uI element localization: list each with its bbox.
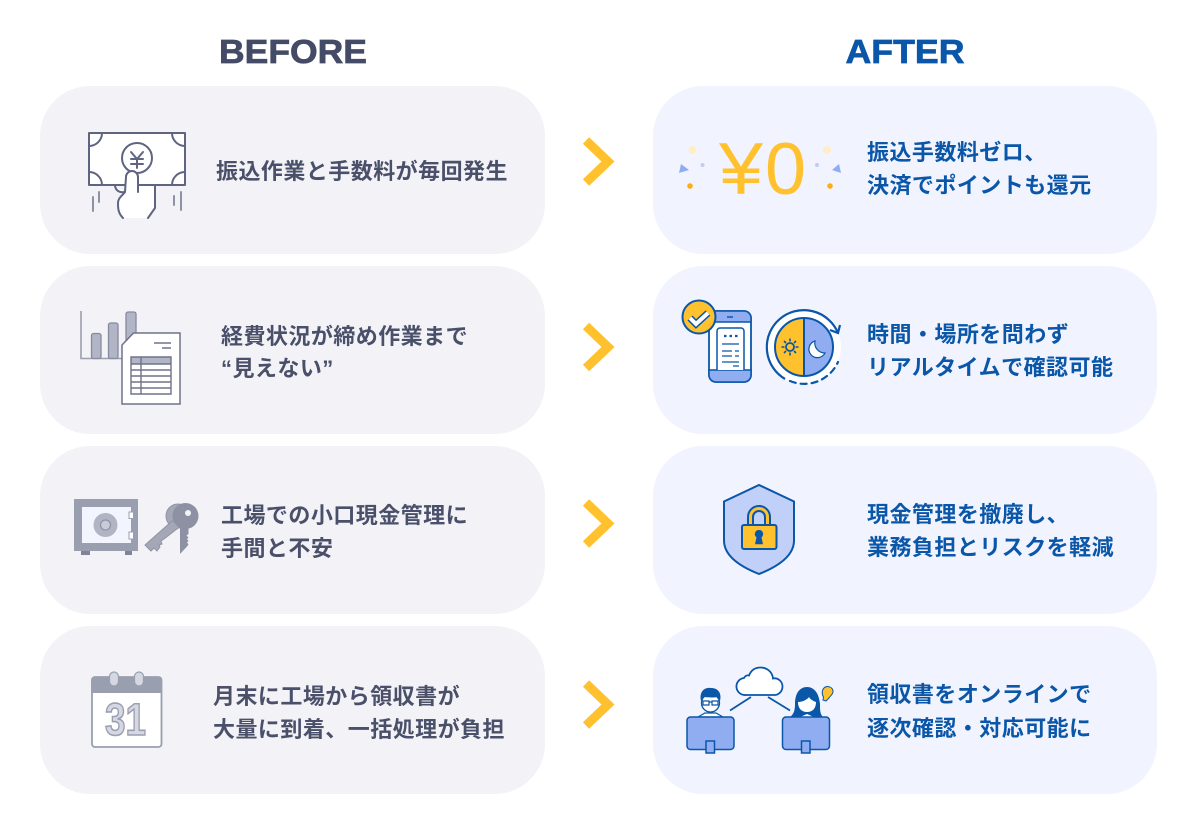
text: after 2: 時間・場所を問わず: [867, 322, 1069, 347]
text: after 2: [867, 322, 1113, 380]
panel: before row 4: [40, 626, 545, 794]
heading: AFTER: AFTER: [846, 33, 965, 70]
text: before 2: “見えない”: [221, 356, 334, 381]
text: after 1: [867, 140, 1092, 198]
icon: calendar 31: 31: [105, 694, 146, 745]
text: before 4: 大量に到着、一括処理が負担: [213, 717, 505, 742]
icon: yen zero with confetti: 0: [765, 129, 806, 210]
text: after 3: [867, 502, 1114, 560]
text: after 1: 決済でポイントも還元: [867, 173, 1092, 198]
icon: shield with padlock: [724, 485, 794, 574]
text: before 4: [213, 684, 505, 742]
icon: calendar 31: [91, 672, 162, 747]
text: before 1: 振込作業と手数料が毎回発生: [216, 159, 508, 184]
text: before 2: 経費状況が締め作業まで: [221, 324, 468, 349]
icon: yen zero with confetti: [679, 129, 841, 210]
text: after 3: 現金管理を撤廃し、: [867, 502, 1069, 527]
text: before 3: 工場での小口現金管理に: [221, 503, 468, 528]
heading: BEFORE: BEFORE: [219, 33, 367, 70]
arrow: row 3: [586, 502, 608, 544]
icon: chart and spreadsheet: [81, 311, 180, 404]
panel: after row 2: [653, 266, 1157, 434]
text: before 3: [221, 503, 468, 561]
panel: after row 3: [653, 446, 1157, 614]
icon: safe and keys: [74, 499, 198, 555]
text: after 4: 領収書をオンラインで: [867, 682, 1092, 707]
text: before 4: 月末に工場から領収書が: [213, 684, 460, 709]
text: after 4: 逐次確認・対応可能に: [867, 716, 1092, 741]
arrow: row 1: [586, 140, 608, 182]
text: after 3: 業務負担とリスクを軽減: [867, 535, 1114, 560]
icon: phone and day-night clock: [682, 300, 841, 384]
text: before 2: [221, 324, 468, 381]
text: after 2: リアルタイムで確認可能: [867, 355, 1113, 380]
panel: after row 4: [653, 626, 1157, 794]
arrow: row 4: [586, 684, 608, 726]
panel: before row 3: [40, 446, 545, 614]
icon: yen zero with confetti: ¥: [718, 129, 763, 210]
panel: before row 2: [40, 266, 545, 434]
text: after 4: [867, 682, 1092, 741]
icon: online workers and cloud: [687, 668, 833, 753]
text: before 3: 手間と不安: [221, 536, 333, 561]
panel: after row 1: [653, 86, 1157, 254]
panel: before row 1: [40, 86, 545, 254]
text: after 1: 振込手数料ゼロ、: [867, 140, 1047, 165]
icon: banknote with yen and hand: [89, 133, 185, 218]
arrow: row 2: [586, 326, 608, 368]
